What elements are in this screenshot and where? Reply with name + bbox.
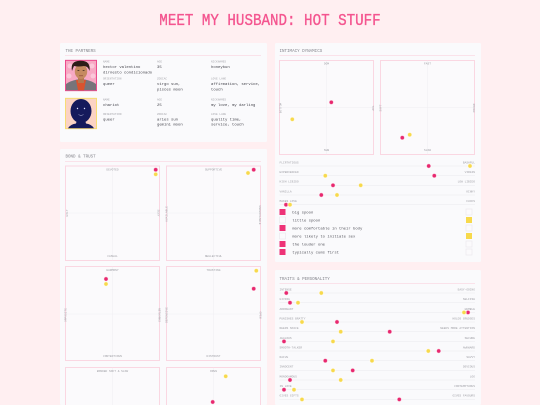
chart: devoted vs casual	[66, 166, 160, 260]
slider: innocent vs devious	[280, 366, 475, 373]
slider: jealous vs secure: SECURE	[465, 337, 475, 340]
checklist row: little spoon: little spoon	[292, 218, 320, 223]
text: chariot details: gemini moon	[157, 123, 183, 128]
slider: experienced vs virgin: VIRGIN	[465, 171, 475, 174]
text: hector details: touch	[211, 87, 223, 92]
chart: trusting vs distrust	[165, 266, 262, 360]
checklist row: typically cums first	[280, 249, 472, 255]
slider: flirtatious vs bashful: FLIRTATIOUS	[280, 161, 299, 164]
text: chariot details: chariot	[103, 103, 119, 108]
slider: naive vs savvy	[280, 356, 475, 363]
slider: monogamous vs lewd: LOG	[470, 375, 475, 378]
slider: giving vs selfish: GIVING	[280, 298, 290, 301]
slider: in love vs contemptuous: IN LOVE	[280, 385, 292, 388]
text: hector details: NAME	[103, 61, 110, 64]
chart: devoted vs casual: CASUAL	[107, 255, 118, 258]
text: chariot details: 25	[157, 104, 162, 108]
chart: fast vs slow: FAST	[424, 63, 431, 66]
slider: makes love vs fucks: MAKES LOVE	[280, 200, 297, 203]
checklist row: big spoon	[280, 209, 472, 215]
text: hector details: virgo sun,	[157, 82, 180, 87]
text: hector details: pisces moon	[157, 87, 183, 92]
slider: innocent vs devious: DEVIOUS	[463, 366, 475, 369]
slider: intense vs easy-going: INTENSE	[280, 288, 292, 291]
slider: punishes bratty vs holds grudges: HOLDS GRUDGES	[452, 317, 475, 320]
icon: chariot portrait	[66, 98, 96, 129]
slider: naive vs savvy: NAIVE	[280, 356, 288, 359]
slider: in love vs contemptuous: CONTEMPTUOUS	[454, 385, 475, 388]
chart: fast vs slow: ROUGH	[472, 104, 475, 113]
slider: smooth-talker vs awkward: AWKWARD	[463, 346, 475, 349]
title: MEET MY HUSBAND: HOT STUFF	[159, 11, 381, 30]
chart: bonded soft and slow: BONDED SOFT & SLOW	[97, 370, 128, 373]
slider: experienced vs virgin	[280, 171, 475, 178]
slider: monogamous vs lewd: MONOGAMOUS	[280, 375, 297, 378]
text: hector details: ORIENTATION	[103, 78, 122, 81]
text: chariot details: queer	[103, 118, 115, 122]
slider: giving vs selfish	[280, 298, 475, 305]
chart: harmony vs contentious: OPPOSITE	[64, 308, 68, 322]
text: hector details: LOVE LANG	[211, 78, 226, 81]
chart: trusting vs distrust: DEFENSIVE	[165, 307, 168, 323]
chart: devoted vs casual: DEVOTED	[106, 169, 119, 172]
chart: devoted vs casual: HOLY	[66, 209, 69, 216]
slider: makes love vs fucks: FUCKS	[466, 200, 475, 203]
slider: smooth-talker vs awkward: SMOOTH-TALKER	[280, 346, 302, 349]
checklist row: more likely to initiate	[280, 233, 472, 239]
text: hector details: NICKNAMES	[211, 61, 226, 64]
text: hector details: affirmation, service,	[211, 82, 260, 87]
slider: vanilla vs kinky: KINKY	[466, 190, 475, 193]
text: chariot details: NICKNAMES	[211, 98, 226, 101]
slider: experienced vs virgin: EXPERIENCED	[280, 171, 299, 174]
text: hector details	[103, 61, 260, 92]
chart: supportive vs neglectful: NEGLECTFUL	[205, 255, 222, 258]
chart: bonded soft and slow	[66, 368, 160, 405]
heading: traits and personality: TRAITS & PERSONALITY	[280, 278, 330, 282]
text: chariot details: aries sun	[157, 117, 178, 122]
text: chariot details: ZODIAC	[157, 113, 167, 116]
slider: jealous vs secure: JEALOUS	[280, 337, 292, 340]
chart: supportive vs neglectful: AVAILABLE	[165, 206, 168, 222]
checklist row: typically cums first: typically cums first	[292, 250, 339, 255]
slider: punishes bratty vs holds grudges	[280, 317, 475, 324]
text: hector details: dirnesto condicionado	[103, 70, 153, 75]
slider: punishes bratty vs holds grudges: PUNISHES BRATTY	[280, 317, 306, 320]
chart: dom vs sub: DOM	[324, 63, 329, 66]
checklist row: big spoon: big spoon	[292, 210, 313, 215]
chart: dom vs sub	[280, 60, 374, 154]
chart: trusting vs distrust: OPEN	[258, 312, 262, 319]
slider: arrogant vs humble	[280, 308, 475, 315]
chart: devoted vs casual: SEXY	[156, 210, 160, 217]
heading: bond and trust: BOND & TRUST	[66, 156, 96, 160]
slider: needs space vs needs more attention	[280, 327, 475, 334]
chart: harmony vs contentious: CONTENTIOUS	[103, 355, 122, 358]
slider: needs space vs needs more attention: NEEDS SPACE	[280, 327, 299, 330]
text: hector details: 35	[157, 66, 162, 70]
checklist row: the louder one	[280, 241, 472, 247]
text: chariot details: NAME	[103, 98, 110, 101]
slider: giving vs selfish: SELFISH	[463, 298, 475, 301]
chart: harmony vs contentious: NETWORKS	[158, 308, 160, 322]
slider: innocent vs devious: INNOCENT	[280, 366, 294, 369]
text: chariot details	[103, 98, 255, 128]
chart: supportive vs neglectful	[165, 166, 261, 260]
heading: the partners: THE PARTNERS	[66, 50, 96, 54]
checklist row: more likely to initiate: more likely to initiate sex	[292, 234, 356, 239]
panel: bond and trust	[60, 149, 267, 405]
chart: supportive vs neglectful: UNAVAILABLE	[258, 205, 261, 225]
checklist row: little spoon	[280, 217, 472, 223]
slider: high vs low libido: HIGH LIBIDO	[280, 181, 299, 184]
slider: arrogant vs humble: HUMBLE	[465, 308, 475, 311]
slider: makes love vs fucks	[280, 200, 475, 207]
slider: naive vs savvy: SAVVY	[466, 356, 475, 359]
panel: intimacy dynamics	[275, 43, 481, 262]
chart: supportive vs neglectful: SUPPORTIVE	[205, 169, 222, 172]
chart: harmony vs contentious	[64, 266, 160, 360]
chart: trusting vs distrust: DISTRUST	[207, 355, 221, 358]
panel: traits and personality	[275, 270, 481, 405]
slider: monogamous vs lewd	[280, 375, 475, 382]
text: chariot details: service, touch	[211, 123, 244, 128]
text: chariot details: quality time,	[211, 117, 241, 122]
icon: hector portrait	[66, 60, 96, 91]
slider: vanilla vs kinky: VANILLA	[280, 190, 292, 193]
chart: harmony vs contentious: HARMONY	[106, 269, 119, 272]
checklist row: the louder one: the louder one	[292, 242, 326, 247]
text: chariot details: AGE	[157, 98, 162, 101]
slider: gives gifts vs gives favours: GIVES FAVOURS	[452, 395, 475, 398]
slider: arrogant vs humble: ARROGANT	[280, 308, 294, 311]
slider: intense vs easy-going: EASY-GOING	[458, 288, 475, 291]
text: hector details: AGE	[157, 61, 162, 64]
slider: in love vs contemptuous	[280, 385, 475, 392]
slider: vanilla vs kinky	[280, 190, 475, 197]
slider: gives gifts vs gives favours	[280, 395, 475, 402]
slider: high vs low libido: LOW LIBIDO	[458, 181, 475, 184]
text: hector details: hector valentino	[103, 65, 141, 70]
text: hector details: honeybun	[211, 65, 230, 70]
panel: the partners	[60, 43, 267, 142]
slider: jealous vs secure	[280, 337, 475, 344]
text: chariot details: my love, my darling	[211, 103, 255, 108]
chart: fast vs slow: SLOW	[424, 149, 431, 152]
slider: smooth-talker vs awkward	[280, 346, 475, 353]
slider: flirtatious vs bashful: BASHFUL	[463, 161, 475, 164]
text: chariot details: LOVE LANG	[211, 113, 226, 116]
checklist row: more comfortable: more comfortable in their body	[292, 226, 363, 231]
chart: dom vs sub: SUB	[324, 149, 329, 152]
checklist row: more comfortable	[280, 225, 472, 231]
slider: high vs low libido	[280, 181, 475, 188]
text: chariot details: ORIENTATION	[103, 113, 122, 116]
chart: dom vs sub: BOTTOM	[280, 103, 282, 113]
chart: open: OPEN	[210, 370, 217, 373]
chart: trusting vs distrust: TRUSTING	[207, 269, 221, 272]
chart: fast vs slow: SOFT	[380, 104, 382, 111]
chart: fast vs slow	[380, 60, 475, 154]
slider: gives gifts vs gives favours: GIVES GIFTS	[280, 395, 299, 398]
text: hector details: queer	[103, 83, 115, 87]
slider: intense vs easy-going	[280, 288, 475, 295]
slider: needs space vs needs more attention: NEEDS MORE ATTENTION	[440, 327, 475, 330]
chart: dom vs sub: TOP	[371, 105, 374, 111]
text: hector details: ZODIAC	[157, 78, 167, 81]
chart: open	[166, 368, 260, 405]
heading: intimacy dynamics: INTIMACY DYNAMICS	[280, 50, 323, 54]
slider: flirtatious vs bashful	[280, 161, 475, 168]
